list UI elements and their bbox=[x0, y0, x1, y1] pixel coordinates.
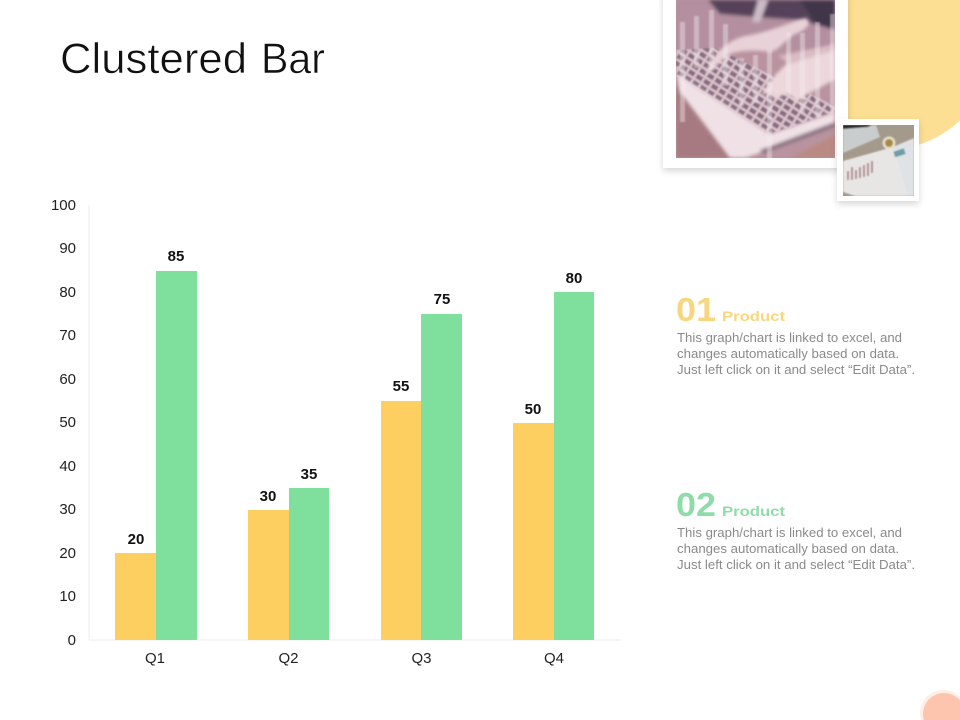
data labels: 75 bbox=[434, 291, 450, 308]
data labels: 80 bbox=[566, 270, 582, 287]
photo card: desk with charts bbox=[837, 119, 919, 201]
legend block 01: This graph/chart is linked to excel, and bbox=[677, 330, 902, 345]
legend block 02: Just left click on it and select “Edit Data”. bbox=[677, 557, 915, 572]
y axis labels: 70 bbox=[59, 327, 76, 344]
bars: series 1 bbox=[115, 401, 554, 640]
title: Clustered bbox=[60, 35, 247, 83]
y axis labels: 30 bbox=[59, 501, 76, 518]
data labels bbox=[128, 248, 582, 548]
title: Bar bbox=[261, 35, 325, 83]
y axis labels: 60 bbox=[59, 371, 76, 388]
y axis labels: 100 bbox=[51, 197, 76, 214]
y axis labels: 90 bbox=[59, 240, 76, 257]
data labels: 35 bbox=[301, 466, 317, 483]
y axis labels: 20 bbox=[59, 545, 76, 562]
bars: series 2 bbox=[156, 271, 594, 640]
data labels: 55 bbox=[393, 378, 409, 395]
legend block 02: 02 bbox=[676, 486, 716, 523]
y axis labels: 50 bbox=[59, 414, 76, 431]
x axis labels: Q2 bbox=[278, 650, 299, 667]
axes bbox=[89, 205, 621, 640]
title bbox=[60, 35, 325, 83]
legend block 02: changes automatically based on data. bbox=[677, 541, 899, 556]
legend block 01: 01 bbox=[676, 291, 716, 328]
photo card: hands on laptop bbox=[663, 0, 848, 168]
y axis labels: 10 bbox=[59, 588, 76, 605]
data labels: 85 bbox=[168, 248, 184, 265]
x axis labels: Q3 bbox=[411, 650, 432, 667]
decorative yellow circle bbox=[775, 0, 960, 150]
y axis labels: 80 bbox=[59, 284, 76, 301]
x axis labels: Q1 bbox=[145, 650, 165, 667]
data labels: 20 bbox=[128, 531, 144, 548]
corner circle bbox=[920, 690, 960, 720]
data labels: 50 bbox=[525, 401, 541, 418]
y axis labels bbox=[51, 197, 76, 649]
data labels: 30 bbox=[260, 488, 276, 505]
legend block 01: Just left click on it and select “Edit Data”. bbox=[677, 362, 915, 377]
legend block 02: This graph/chart is linked to excel, and bbox=[677, 525, 902, 540]
legend block 01 bbox=[676, 291, 915, 377]
x axis labels: Q4 bbox=[544, 650, 564, 667]
legend block 02 bbox=[676, 486, 915, 572]
chart: clustered bar bbox=[51, 197, 621, 667]
x axis labels bbox=[145, 650, 564, 667]
y axis labels: 40 bbox=[59, 458, 76, 475]
legend block 02: Product bbox=[722, 503, 785, 519]
legend block 01: Product bbox=[722, 308, 785, 324]
y axis labels: 0 bbox=[68, 632, 76, 649]
legend block 01: changes automatically based on data. bbox=[677, 346, 899, 361]
